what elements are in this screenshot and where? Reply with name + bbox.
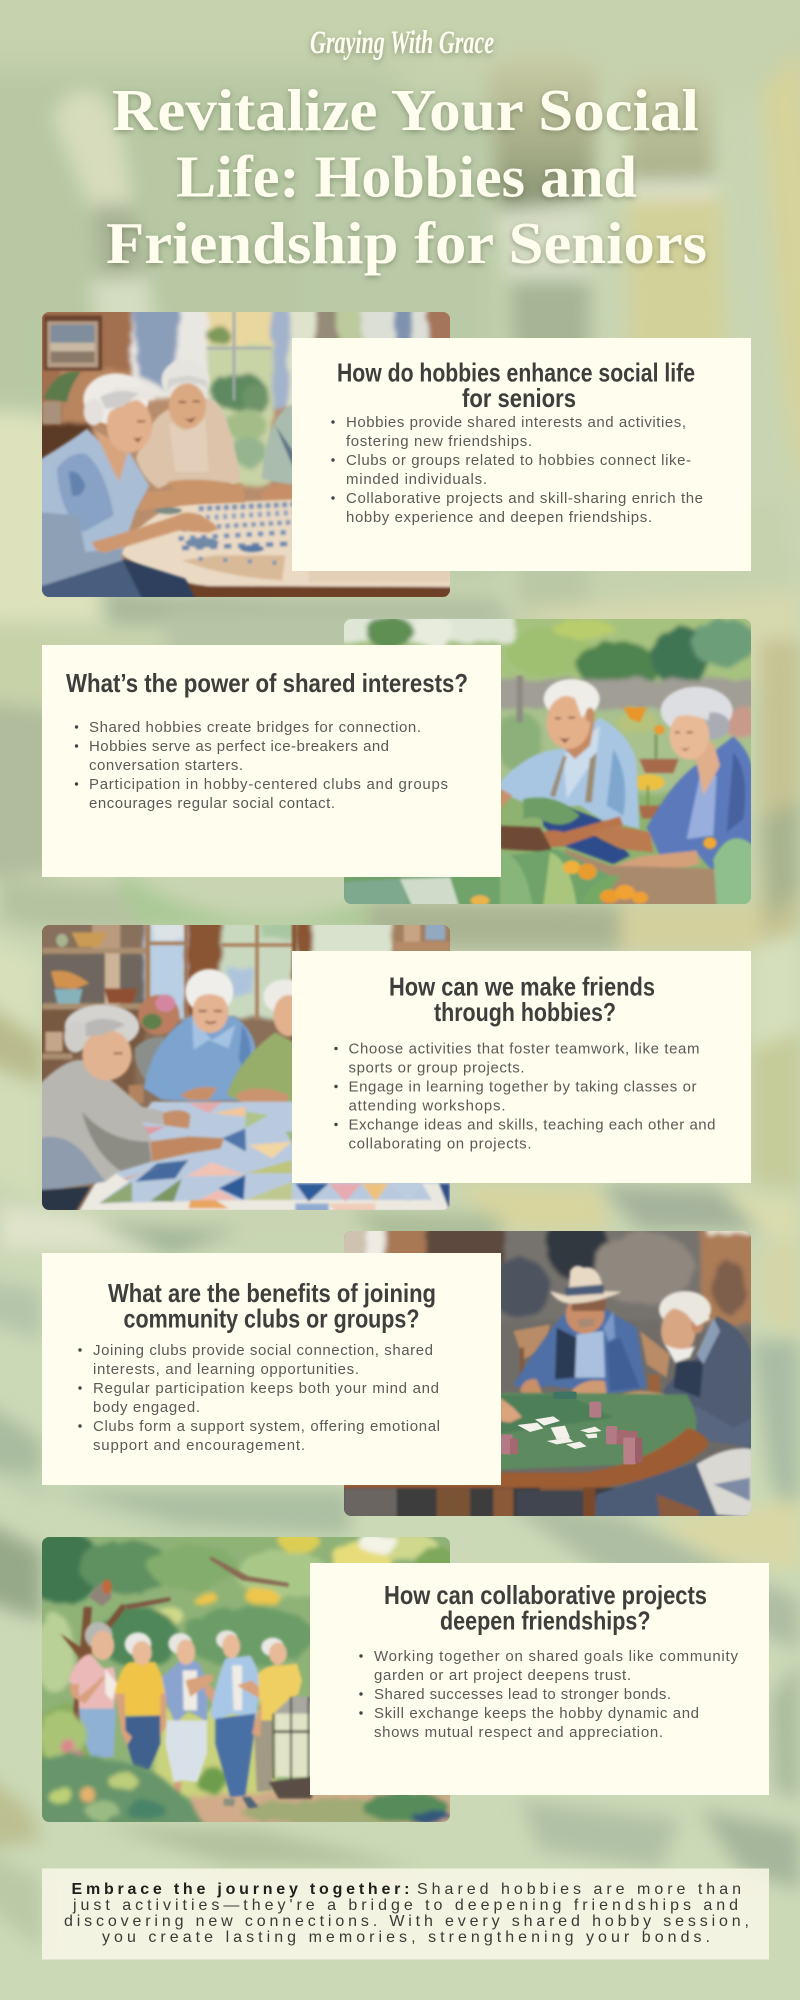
card: make friends through hobbies: collaborating on projects. xyxy=(348,1136,532,1152)
garden bed and foreground plants xyxy=(340,798,753,909)
card: make friends through hobbies xyxy=(292,951,751,1183)
card: collaborative projects: deepen friendships? xyxy=(440,1606,650,1636)
card table with chips xyxy=(340,1391,753,1521)
card: how do hobbies enhance social life: Hobbies provide shared interests and activities, xyxy=(346,414,686,431)
closing callout: Shared hobbies are more than xyxy=(417,1881,741,1898)
gardener woman xyxy=(590,687,753,876)
image: two men playing cards xyxy=(344,1231,751,1516)
five friends xyxy=(69,1622,302,1809)
card: collaborative projects: Working together on shared goals like community xyxy=(374,1648,738,1665)
woman in grey xyxy=(39,1005,224,1212)
panel: make friends through hobbies xyxy=(32,915,751,1212)
card: benefits of community clubs: Clubs form a support system, offering emotional xyxy=(93,1418,440,1435)
panel: how do hobbies enhance social life xyxy=(35,305,751,602)
front woman xyxy=(39,373,245,602)
card: power of shared interests: Hobbies serve as perfect ice-breakers and xyxy=(89,738,389,755)
closing callout xyxy=(42,1868,769,1960)
card: power of shared interests: What’s the power of shared interests? xyxy=(66,668,468,698)
closing callout: just activities—they're a bridge to deepening friendships and xyxy=(72,1897,738,1914)
card: power of shared interests xyxy=(42,645,501,877)
card: benefits of community clubs: Regular participation keeps both your mind and xyxy=(93,1380,439,1397)
panel: collaborative projects xyxy=(22,1527,769,1827)
older man with beard xyxy=(623,1291,753,1448)
card: collaborative projects: Skill exchange keeps the hobby dynamic and xyxy=(374,1705,699,1722)
card: make friends through hobbies: Engage in learning together by taking classes or xyxy=(348,1078,696,1096)
card: make friends through hobbies: Choose activities that foster teamwork, like team xyxy=(348,1040,700,1058)
card: how do hobbies enhance social life: minded individuals. xyxy=(346,471,487,488)
card: make friends through hobbies: How can we make friends xyxy=(389,972,655,1002)
card: benefits of community clubs: What are the benefits of joining xyxy=(108,1278,436,1308)
card: benefits of community clubs: body engaged. xyxy=(93,1399,200,1416)
card: how do hobbies enhance social life: hobby experience and deepen friendships. xyxy=(346,509,652,526)
title: Life: Hobbies and xyxy=(176,144,637,210)
card: how do hobbies enhance social life: Clubs or groups related to hobbies connect like- xyxy=(346,452,691,469)
card: benefits of community clubs: Joining clubs provide social connection, shared xyxy=(93,1342,433,1359)
panel: power of shared interests xyxy=(42,609,760,912)
card: make friends through hobbies: sports or group projects. xyxy=(348,1060,524,1076)
card: how do hobbies enhance social life: for seniors xyxy=(462,383,576,413)
woman in blue xyxy=(144,969,256,1102)
card: collaborative projects: shows mutual respect and appreciation. xyxy=(374,1724,663,1741)
table with puzzle pieces xyxy=(120,494,455,599)
title: Revitalize Your Social xyxy=(112,77,699,143)
card: make friends through hobbies: Exchange ideas and skills, teaching each other and xyxy=(348,1116,716,1134)
foreground foliage xyxy=(35,1710,205,1827)
title: Friendship for Seniors xyxy=(106,210,707,276)
card: benefits of community clubs xyxy=(42,1253,501,1485)
card: power of shared interests: conversation starters. xyxy=(89,757,243,774)
image: couple gardening xyxy=(344,619,751,904)
card: how do hobbies enhance social life xyxy=(292,338,751,571)
image: two women doing a jigsaw puzzle xyxy=(35,305,458,602)
image: women quilting together xyxy=(32,915,455,1212)
card: power of shared interests: Participation in hobby-centered clubs and groups xyxy=(89,776,448,793)
closing callout: Embrace the journey together: xyxy=(72,1881,410,1898)
card: benefits of community clubs: community clubs or groups? xyxy=(124,1304,420,1334)
closing callout: discovering new connections. With every shared hobby session, xyxy=(64,1913,749,1930)
gardener man xyxy=(498,679,639,864)
card: power of shared interests: encourages regular social contact. xyxy=(89,795,335,812)
back woman xyxy=(135,361,240,490)
closing callout: you create lasting memories, strengthening your bonds. xyxy=(102,1929,710,1946)
card: collaborative projects: How can collaborative projects xyxy=(384,1580,707,1610)
panel: benefits of community clubs xyxy=(42,1231,751,1516)
card: how do hobbies enhance social life: fostering new friendships. xyxy=(346,433,532,450)
card: benefits of community clubs: support and encouragement. xyxy=(93,1437,305,1454)
man in hat xyxy=(513,1266,647,1399)
woman in green xyxy=(226,978,292,1103)
image: friends birdwatching in a garden xyxy=(42,1537,450,1822)
card: benefits of community clubs: interests, and learning opportunities. xyxy=(93,1361,359,1378)
card: collaborative projects: garden or art project deepens trust. xyxy=(374,1667,631,1684)
quilt xyxy=(79,1102,455,1212)
card: how do hobbies enhance social life: How do hobbies enhance social life xyxy=(337,358,695,388)
card: make friends through hobbies: attending workshops. xyxy=(348,1098,506,1114)
logo: Graying With Grace: Graying With Grace xyxy=(310,25,494,61)
bird cage xyxy=(269,1696,315,1799)
card: how do hobbies enhance social life: Collaborative projects and skill-sharing enrich the xyxy=(346,490,703,507)
card: collaborative projects: Shared successes lead to stronger bonds. xyxy=(374,1686,671,1703)
card: collaborative projects xyxy=(310,1563,769,1795)
title xyxy=(106,77,707,276)
card: make friends through hobbies: through hobbies? xyxy=(434,997,616,1027)
card: power of shared interests: Shared hobbies create bridges for connection. xyxy=(89,719,421,736)
